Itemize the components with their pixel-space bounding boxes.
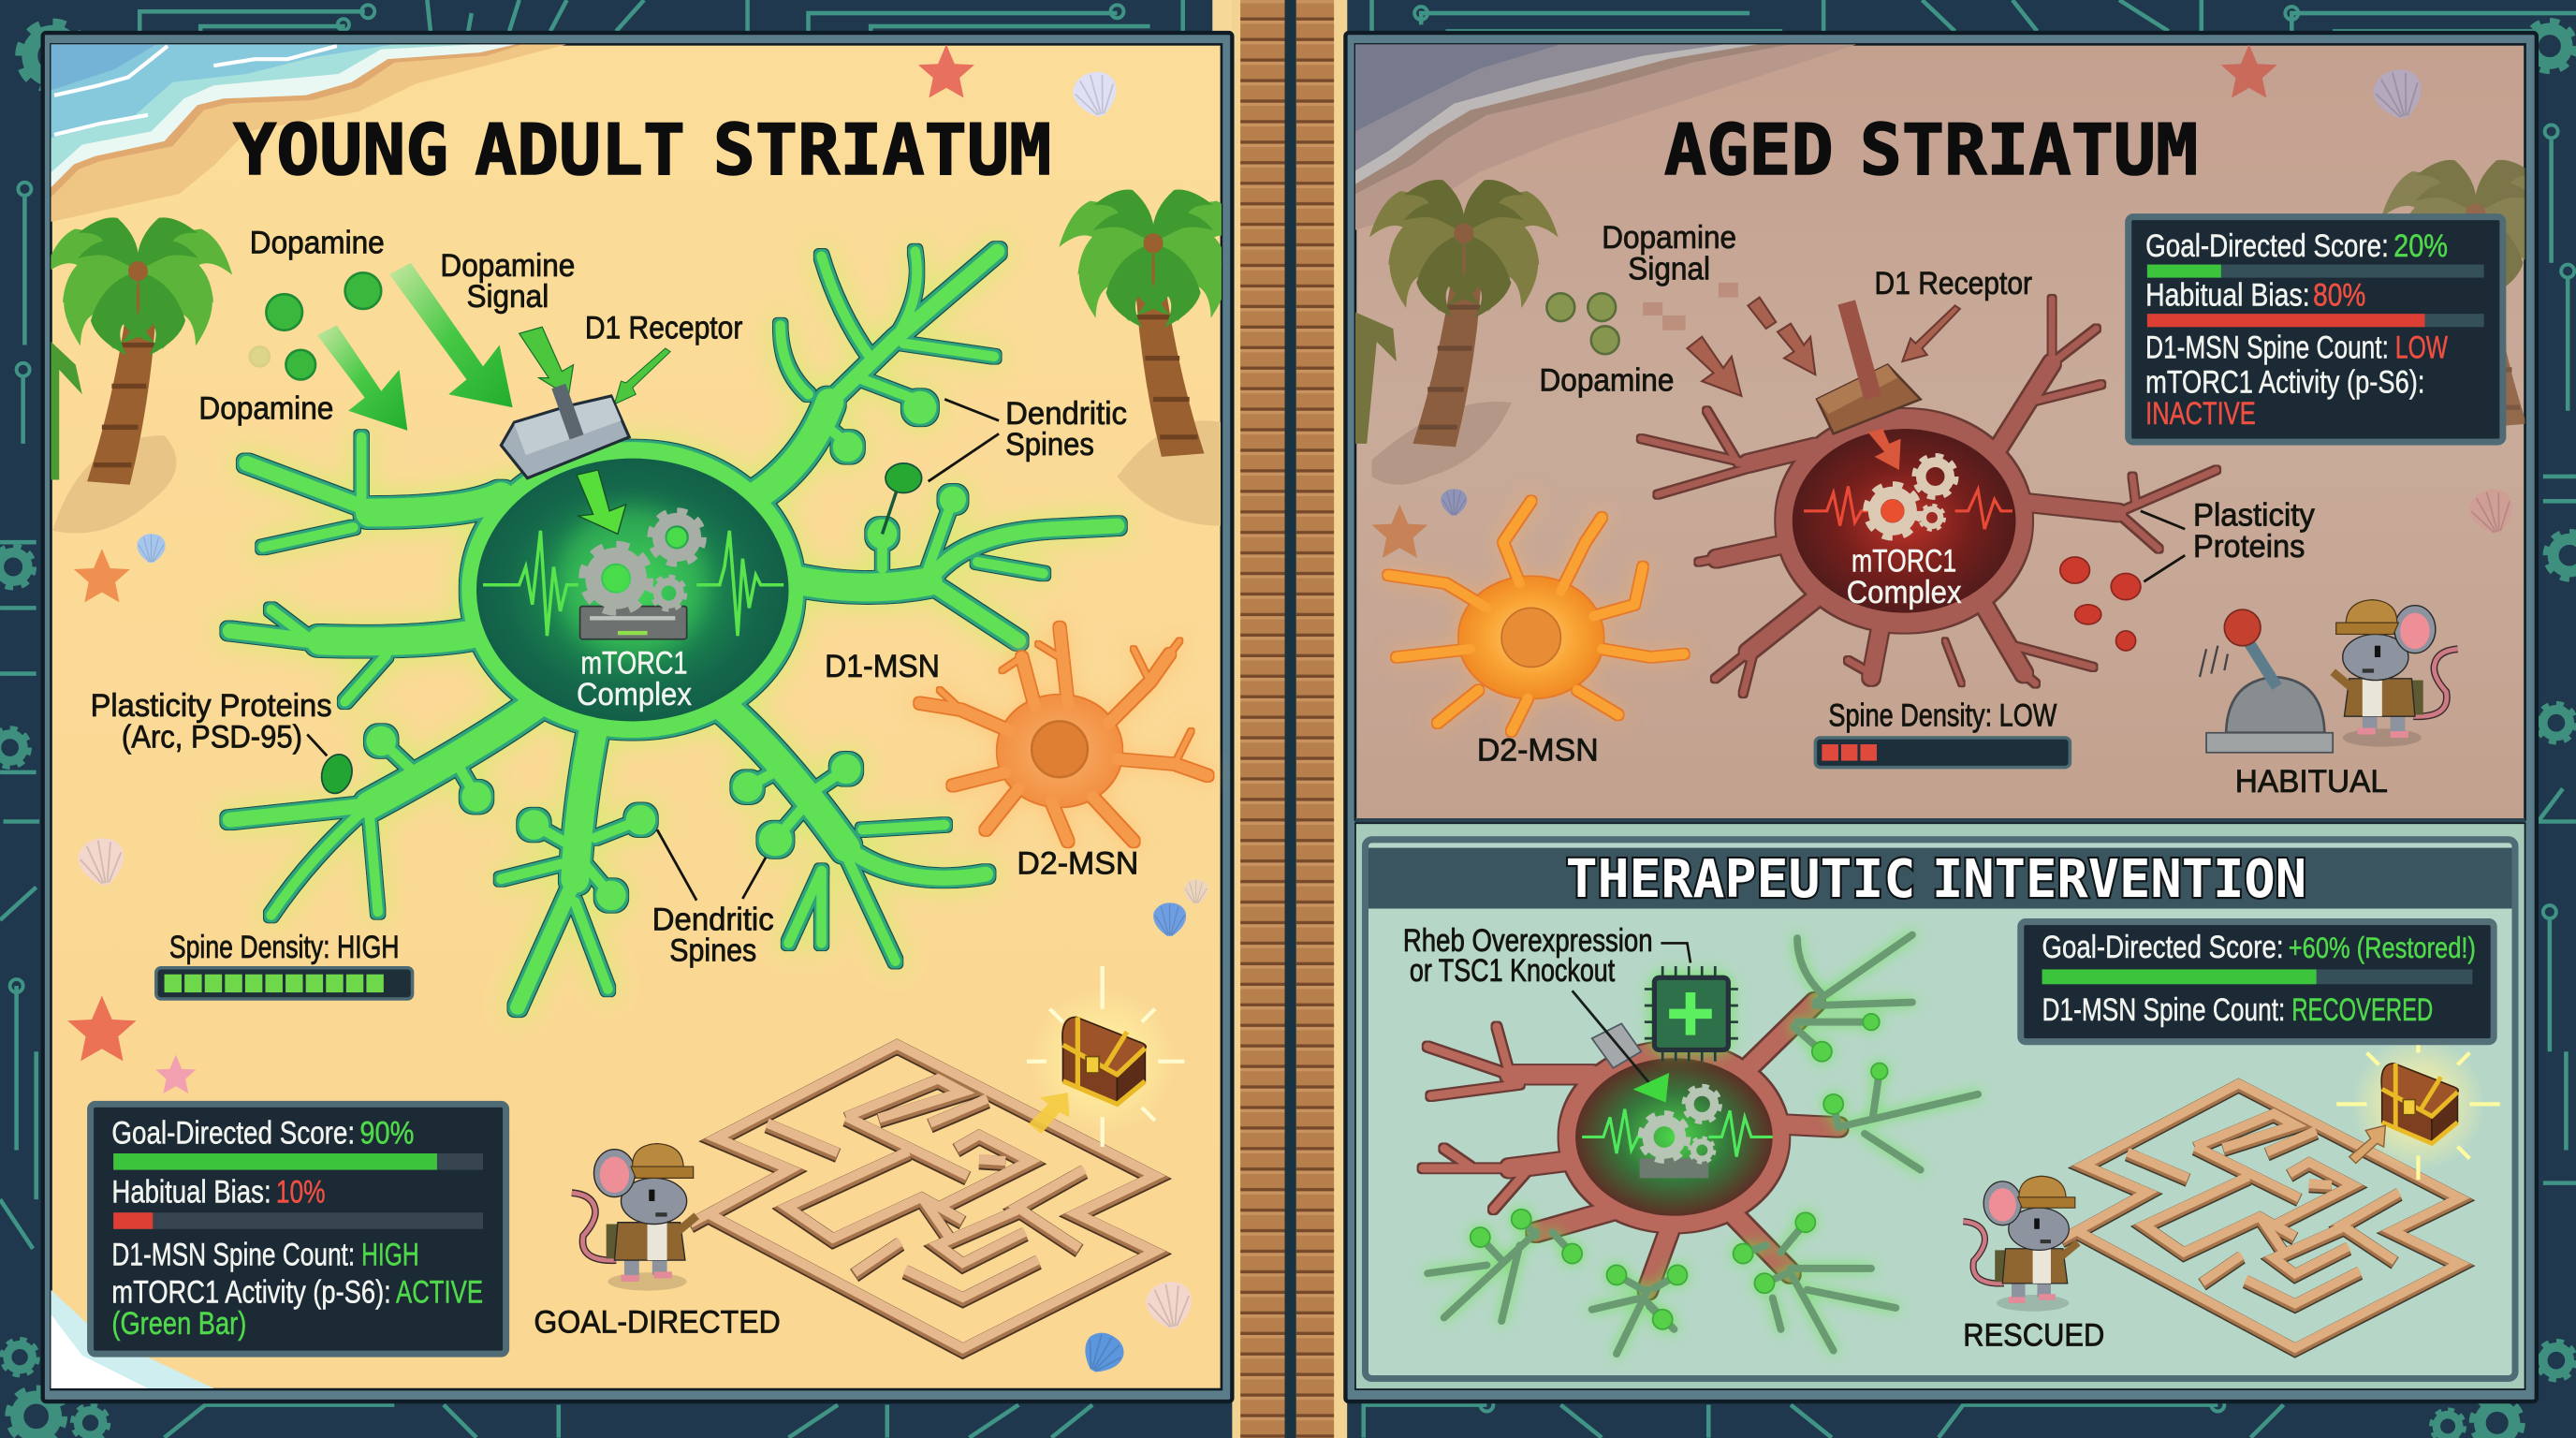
arrow: into aged soma (1868, 429, 1901, 470)
arrow: receptor to mTORC1 (577, 470, 626, 534)
D2 nucleus (1032, 721, 1088, 777)
soma (476, 459, 788, 721)
green regrown branches (1427, 935, 1978, 1354)
label: mTORC1 Complex: mTORC1 (1852, 544, 1956, 580)
D1 receptor (501, 386, 629, 478)
title: STRIATUM (713, 110, 1051, 191)
callout: plasticity proteins aged: Plasticity (2193, 498, 2316, 534)
stats panel aged: INACTIVE (2145, 396, 2256, 432)
soma (1793, 429, 2015, 613)
spine density meter: Spine Density: HIGH (169, 930, 400, 965)
stats panel: 90% (359, 1115, 414, 1151)
label: D2-MSN: D2-MSN (1477, 733, 1599, 769)
label: mTORC1 Complex: Complex (1847, 575, 1962, 610)
callout: plasticity proteins (91, 688, 332, 756)
neuron: rescued (1423, 935, 1978, 1354)
treasure chest: young (1027, 966, 1184, 1147)
stats panel: 10% (276, 1175, 326, 1211)
section divider and background (1355, 818, 2525, 1390)
gears rescued (1640, 1087, 1720, 1178)
stats panel rescued: D1-MSN Spine Count: (2042, 992, 2285, 1028)
stats panel aged: LOW (2395, 330, 2449, 366)
label: Rheb Overexpression or TSC1 Knockout (1403, 923, 1690, 989)
title: AGED (1664, 110, 1834, 191)
pulse traces (1804, 486, 2012, 529)
therapy chip (1645, 966, 1738, 1062)
palm shadow right (1117, 420, 1221, 526)
brown dendrites (1423, 1003, 1838, 1290)
callout: dendritic spines upper (929, 396, 1127, 481)
panel frame (43, 33, 1232, 1401)
beach stars and shells (67, 44, 1208, 1380)
label: Rheb Overexpression or TSC1 Knockout: Rheb Overexpression (1403, 923, 1653, 959)
label: Rheb Overexpression or TSC1 Knockout: or TSC1 Knockout (1410, 953, 1616, 989)
receptor small (1592, 1023, 1641, 1068)
label: D1 Receptor: D1 Receptor (585, 311, 742, 346)
label: mTORC1 Complex (1847, 544, 1962, 610)
callout: plasticity proteins: (Arc, PSD-95) (122, 720, 302, 756)
tagged spines (317, 463, 922, 797)
stats panel (91, 1104, 506, 1354)
arrow: maze exit (1029, 1093, 1070, 1134)
callout: plasticity proteins: Plasticity Proteins (91, 688, 332, 724)
neuron: D1-MSN (230, 252, 1117, 1007)
stats panel: D1-MSN Spine Count: (111, 1237, 355, 1272)
degraded protein fragments (2060, 557, 2141, 651)
pulse traces (483, 531, 783, 636)
label: Dopamine Signal: Signal (466, 279, 549, 315)
stats panel aged (2129, 217, 2503, 442)
label: Dopamine: Dopamine (250, 225, 385, 260)
label: Dopamine Signal (1602, 220, 1736, 286)
habit lever (2200, 609, 2333, 753)
label: mTORC1 Complex: mTORC1 (580, 646, 688, 682)
palm tree left (51, 217, 232, 485)
stats panel rescued: RECOVERED (2291, 992, 2433, 1028)
arrows: dopamine signal (317, 263, 670, 431)
maze: young (690, 1044, 1155, 1351)
label: HABITUAL: HABITUAL (2235, 764, 2388, 800)
panel frame (1345, 33, 2537, 1401)
mouse: goal-directed (572, 1143, 696, 1291)
sand background (51, 44, 1222, 1389)
title: YOUNG (233, 110, 448, 191)
callout: plasticity proteins aged: Proteins (2193, 529, 2305, 565)
label: Dopamine Signal: Signal (1628, 251, 1710, 286)
label: RESCUED: RESCUED (1963, 1317, 2104, 1353)
stats panel rescued: Goal-Directed Score: (2042, 930, 2284, 965)
label: Dopamine Signal: Dopamine (1602, 220, 1736, 256)
aged sand background (1355, 44, 2525, 820)
panel: young adult striatum (35, 33, 1256, 1401)
title: STRIATUM (1860, 110, 2198, 191)
stats panel aged: mTORC1 Activity (p-S6): (2145, 364, 2424, 400)
palm tree small left edge (51, 342, 82, 479)
treasure chest: rescued (2336, 1020, 2500, 1180)
palm shadow (1372, 402, 1512, 485)
beach stars and shells aged (1371, 44, 2519, 558)
callout: dendritic spines lower (652, 829, 774, 969)
spine density meter low: Spine Density: LOW (1828, 698, 2057, 734)
gears aged (1867, 457, 1955, 536)
callout: dendritic spines lower: Spines (669, 933, 756, 969)
header bar (1368, 848, 2511, 909)
palm tree aged right (2383, 159, 2525, 425)
label: goal-directed: GOAL-DIRECTED (534, 1304, 781, 1340)
label: D2-MSN: D2-MSN (1017, 846, 1138, 882)
stats panel aged: Goal-Directed Score: (2145, 228, 2389, 264)
stats panel aged: Habitual Bias: (2145, 277, 2310, 313)
faded dopamine arrows (1643, 283, 1960, 396)
stats panel rescued: +60% (Restored!) (2289, 931, 2476, 964)
mint background (1355, 823, 2525, 1389)
sea and shoreline (51, 44, 567, 1388)
mouse: rescued (1963, 1176, 2078, 1312)
spine density meter (156, 930, 413, 999)
dendrites and body (1641, 299, 2217, 694)
palm tree aged small (1355, 312, 1397, 444)
label: Dopamine lower: Dopamine (198, 391, 333, 427)
degraded dopamine molecules (1546, 293, 1619, 354)
label: Dopamine: Dopamine (1540, 363, 1674, 399)
spine density meter low (1815, 698, 2070, 768)
pulse traces (1582, 1109, 1773, 1157)
D2 nucleus aged (1501, 608, 1560, 668)
dopamine molecules (250, 272, 381, 379)
label: mTORC1 Complex: Complex (577, 677, 692, 712)
stats panel: Habitual Bias: (111, 1175, 271, 1211)
header title: INTERVENTION (1932, 849, 2306, 910)
title (233, 110, 1051, 191)
arrow: rescued maze exit (2349, 1125, 2385, 1164)
mTORC1 gears (557, 507, 708, 659)
D2-MSN aged overactive (1388, 501, 1684, 731)
title: ADULT (475, 110, 685, 191)
panel: therapeutic intervention (1355, 818, 2525, 1390)
callout: dendritic spines lower: Dendritic (652, 902, 774, 937)
header title (1566, 849, 2306, 910)
aged receptor lever (1817, 302, 1921, 433)
stats panel aged: D1-MSN Spine Count: (2145, 330, 2389, 366)
callout: dendritic spines upper: Dendritic (1005, 396, 1127, 432)
palm tree aged left (1369, 180, 1558, 448)
title (1664, 110, 2198, 191)
stats panel: Goal-Directed Score: (111, 1115, 355, 1151)
stats panel aged: 20% (2393, 228, 2448, 264)
dendrites and body (230, 252, 1117, 1007)
label: Dopamine Signal (440, 248, 575, 315)
palm tree right (1059, 189, 1222, 457)
panel: aged striatum (1345, 33, 2576, 1401)
neuron: aged D1-MSN (1641, 299, 2217, 694)
stats panel: (Green Bar) (111, 1306, 246, 1342)
maze: rescued (2061, 1083, 2460, 1350)
stats panel: ACTIVE (396, 1275, 483, 1311)
header title: THERAPEUTIC (1566, 849, 1915, 910)
mouse: habitual (2333, 600, 2458, 747)
stats panel rescued (2021, 922, 2494, 1042)
central brick divider (1212, 0, 1347, 1438)
stats panel: HIGH (361, 1237, 419, 1272)
stats panel: mTORC1 Activity (p-S6): (111, 1275, 391, 1311)
D2-MSN neuron (920, 627, 1208, 842)
soma (1575, 1058, 1773, 1216)
arrow: therapy to soma (1573, 990, 1669, 1103)
stats panel aged: 80% (2313, 277, 2365, 313)
callout: plasticity proteins aged (2141, 498, 2316, 581)
label: D1-MSN: D1-MSN (825, 649, 940, 684)
inner frame (1365, 840, 2515, 1378)
label: Dopamine Signal: Dopamine (440, 248, 575, 284)
aged sea (1355, 44, 1856, 230)
callout: dendritic spines upper: Spines (1005, 427, 1094, 462)
label: mTORC1 Complex (577, 646, 692, 712)
palm shadow left (52, 435, 176, 534)
label: D1 Receptor: D1 Receptor (1875, 266, 2032, 301)
